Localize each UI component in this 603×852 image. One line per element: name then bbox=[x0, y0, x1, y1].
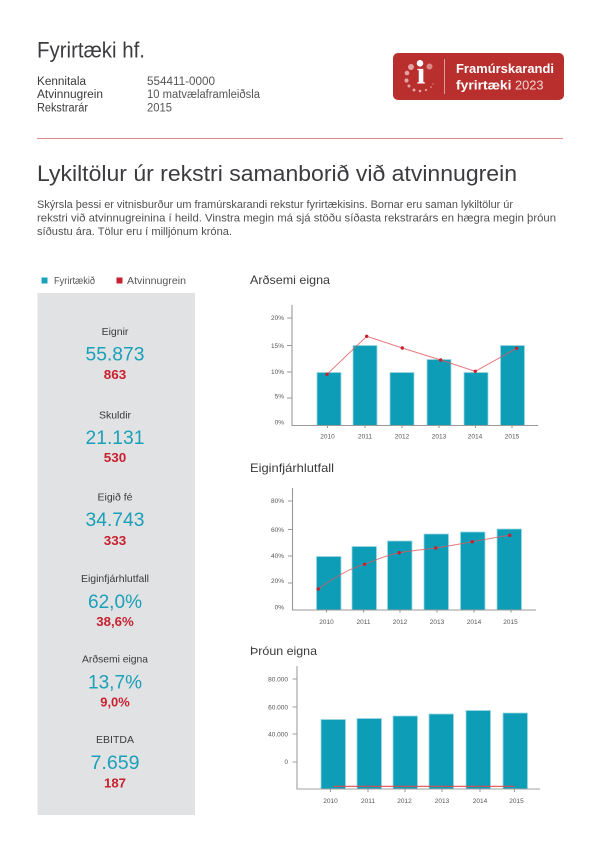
chart: Þróun eigna: 2011 bbox=[361, 798, 375, 805]
intro paragraph: rekstri við atvinnugreinina í heild. Vinstra megin má sjá stöðu síðasta rekstrarárs en hægra megin þróun bbox=[37, 212, 556, 224]
figure: EBITDA: 7.659 bbox=[90, 752, 140, 774]
figure: EBITDA: EBITDA bbox=[96, 734, 134, 746]
chart: Þróun eigna: 0 bbox=[284, 759, 288, 766]
figure: Eiginfjárhlutfall: Eiginfjárhlutfall bbox=[81, 573, 149, 585]
chart: Arðsemi eigna: 2014 bbox=[468, 434, 483, 440]
chart: Eiginfjárhlutfall bbox=[271, 488, 536, 626]
badge: Framúrskarandi fyrirtæki 2023: 2023 bbox=[515, 78, 544, 92]
figure: Arðsemi eigna: 13,7% bbox=[88, 672, 142, 694]
chart: Arðsemi eigna: 0% bbox=[275, 420, 284, 426]
company name: Fyrirtæki hf. bbox=[37, 38, 145, 62]
figure: EBITDA bbox=[90, 734, 140, 790]
company details: Atvinnugrein bbox=[37, 89, 103, 101]
chart: Arðsemi eigna: 10% bbox=[271, 369, 284, 376]
panel: key figures bbox=[38, 293, 195, 815]
heading: Þróun eigna: Þróun eigna bbox=[250, 644, 317, 658]
badge: Framúrskarandi fyrirtæki 2023: ı bbox=[417, 54, 426, 90]
heading: Arðsemi eigna: Arðsemi eigna bbox=[250, 273, 330, 287]
intro paragraph bbox=[37, 199, 556, 238]
figure: Eigið fé bbox=[86, 492, 144, 548]
main heading: Lykiltölur úr rekstri samanborið við atvinnugrein bbox=[37, 161, 517, 186]
chart: Arðsemi eigna: 2015 bbox=[505, 434, 520, 440]
chart: Eiginfjárhlutfall: 80% bbox=[271, 498, 284, 505]
chart: Eiginfjárhlutfall: 60% bbox=[271, 527, 284, 534]
chart: Eiginfjárhlutfall: 2010 bbox=[319, 619, 334, 626]
figure: Eigið fé: 333 bbox=[104, 533, 126, 548]
badge: Framúrskarandi fyrirtæki 2023 bbox=[393, 53, 564, 100]
figure: Skuldir: Skuldir bbox=[99, 410, 132, 422]
chart: Eiginfjárhlutfall: 2014 bbox=[467, 619, 482, 626]
figure: Eiginfjárhlutfall: 62,0% bbox=[88, 591, 142, 613]
intro paragraph: síðustu ára. Tölur eru í milljónum króna. bbox=[37, 226, 232, 238]
chart: Eiginfjárhlutfall: 2013 bbox=[430, 619, 445, 626]
chart: Eiginfjárhlutfall: 40% bbox=[271, 553, 284, 560]
chart: Þróun eigna: 2012 bbox=[397, 798, 412, 805]
chart: Þróun eigna bbox=[268, 666, 540, 805]
chart: Arðsemi eigna bbox=[271, 305, 538, 440]
chart: Þróun eigna: 2013 bbox=[435, 798, 450, 805]
chart: Eiginfjárhlutfall: 2011 bbox=[357, 619, 371, 626]
chart: Þróun eigna: 2010 bbox=[323, 798, 338, 805]
figure: Eignir: 863 bbox=[104, 367, 126, 382]
chart: Eiginfjárhlutfall: 2012 bbox=[393, 619, 408, 626]
figure: Eignir: 55.873 bbox=[86, 344, 144, 366]
company details: Kennitala bbox=[37, 76, 87, 88]
company details: 10 matvælaframleiðsla bbox=[147, 89, 261, 101]
legend: Fyrirtækið bbox=[54, 275, 95, 287]
chart: Eiginfjárhlutfall: 20% bbox=[271, 578, 284, 585]
figure: Arðsemi eigna: Arðsemi eigna bbox=[82, 654, 148, 666]
figure: Eignir bbox=[86, 326, 144, 382]
chart: Arðsemi eigna: 2011 bbox=[358, 434, 372, 440]
chart: Arðsemi eigna: 2010 bbox=[320, 434, 335, 440]
figure: Skuldir: 21.131 bbox=[86, 427, 144, 449]
badge: Framúrskarandi fyrirtæki 2023: fyrirtæki bbox=[456, 78, 512, 92]
chart: Þróun eigna: 80.000 bbox=[268, 676, 288, 684]
intro paragraph: Skýrsla þessi er vitnisburður um framúrskarandi rekstur fyrirtækisins. Bornar eru saman lykiltölur úr bbox=[37, 199, 513, 211]
heading: Eiginfjárhlutfall: Eiginfjárhlutfall bbox=[250, 461, 334, 475]
company details: 554411-0000 bbox=[147, 76, 215, 88]
chart: Eiginfjárhlutfall: 2015 bbox=[503, 619, 518, 626]
figure: Arðsemi eigna bbox=[82, 654, 148, 710]
legend bbox=[42, 275, 186, 287]
company details: 2015 bbox=[147, 102, 172, 114]
company details bbox=[37, 76, 261, 114]
figure: Eigið fé: 34.743 bbox=[86, 509, 144, 531]
figure: Arðsemi eigna: 9,0% bbox=[100, 694, 130, 710]
figure: Eiginfjárhlutfall: 38,6% bbox=[96, 614, 134, 629]
figure: Eigið fé: Eigið fé bbox=[97, 492, 133, 504]
chart: Eiginfjárhlutfall: 0% bbox=[275, 604, 284, 612]
figure: Eignir: Eignir bbox=[102, 326, 129, 338]
chart: Þróun eigna: 40.000 bbox=[268, 732, 288, 738]
figure: Skuldir: 530 bbox=[104, 450, 126, 465]
legend: Atvinnugrein bbox=[127, 275, 186, 287]
chart: Þróun eigna: 2015 bbox=[509, 798, 524, 805]
chart: Arðsemi eigna: 2012 bbox=[395, 434, 410, 440]
company details: Rekstrarár bbox=[37, 102, 88, 114]
chart: Arðsemi eigna: 20% bbox=[271, 315, 284, 322]
figure: Skuldir bbox=[86, 410, 144, 465]
chart: Arðsemi eigna: 2013 bbox=[432, 434, 447, 440]
chart: Þróun eigna: 2014 bbox=[473, 798, 488, 805]
figure: Eiginfjárhlutfall bbox=[81, 573, 149, 629]
figure: EBITDA: 187 bbox=[104, 776, 126, 790]
chart: Þróun eigna: 60.000 bbox=[268, 704, 288, 712]
badge: Framúrskarandi fyrirtæki 2023: Framúrskarandi bbox=[456, 61, 554, 76]
chart: Arðsemi eigna: 15% bbox=[271, 343, 284, 350]
chart: Arðsemi eigna: 5% bbox=[275, 394, 284, 400]
